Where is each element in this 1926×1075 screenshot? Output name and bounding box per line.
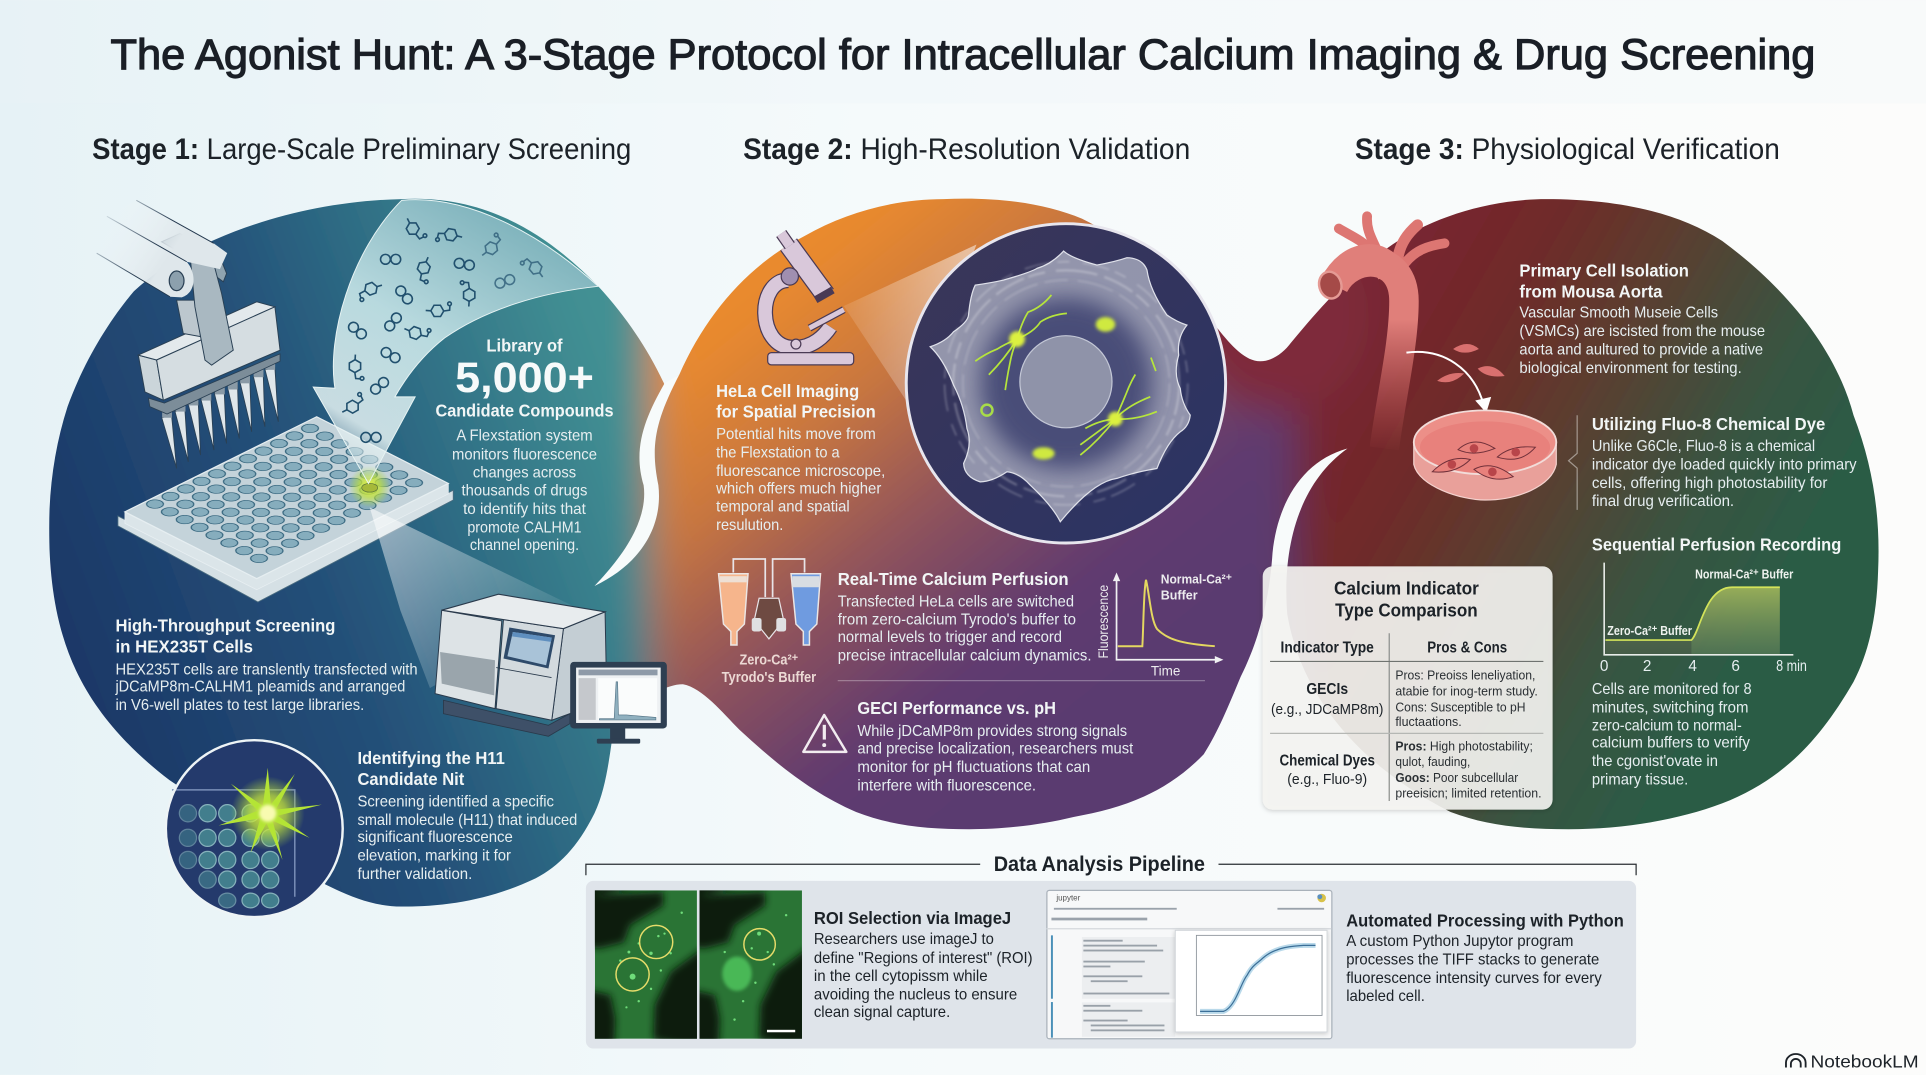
micrographs: ROI selection	[577, 878, 811, 1052]
inset: glowing hit well	[166, 740, 343, 917]
text: perfusion description: calcium buffers to verify	[1592, 735, 1750, 752]
heading: stage 2: Stage 2: High-Resolution Validation	[743, 133, 1190, 166]
heading: data analysis pipeline: Data Analysis Pipeline	[994, 853, 1205, 876]
text: real-time perfusion: normal levels to trigger and record	[838, 629, 1062, 646]
text: high-throughput screening: jDCaMP8m-CALHM1 pleamids and arranged	[115, 679, 405, 696]
label: zero-Ca buffer	[722, 653, 816, 686]
row: GECIs: atabie for inog-term study.	[1395, 683, 1538, 698]
jupyter notebook screenshot	[1047, 890, 1332, 1039]
96-well plate	[118, 417, 453, 602]
text: library callout	[435, 335, 614, 554]
text: HeLa imaging: Potential hits move from	[716, 426, 876, 443]
text: library callout: channel opening.	[470, 537, 579, 554]
text: real-time perfusion: Real-Time Calcium Perfusion	[838, 569, 1069, 589]
row: GECIs: Pros: Preoiss leneliyation,	[1395, 667, 1535, 682]
microscope light beam	[844, 245, 977, 410]
text: HeLa imaging: HeLa Cell Imaging	[716, 381, 859, 401]
row: GECIs: Cons: Susceptible to pH	[1395, 699, 1526, 714]
table header: Pros & Cons	[1427, 639, 1507, 656]
text: ROI selection	[814, 908, 1033, 1021]
text: real-time perfusion: Transfected HeLa cells are switched	[838, 593, 1074, 610]
text: python processing: Automated Processing with Python	[1346, 910, 1624, 930]
panel: stage 3	[1263, 216, 1857, 810]
text: H11 candidate hit: elevation, marking it for	[357, 848, 511, 865]
comparison table card	[1263, 566, 1553, 810]
text: H11 candidate hit: small molecule (H11) that induced	[357, 812, 577, 829]
compound funnel arrow	[313, 200, 598, 483]
text: python processing	[1346, 910, 1624, 1005]
icon: warning triangle	[803, 715, 846, 752]
chart inset: fluorescence curve	[1175, 930, 1327, 1032]
chart: calcium transient: Time	[1151, 663, 1181, 679]
text: HeLa imaging: for Spatial Precision	[716, 402, 876, 422]
text: library callout: Library of	[486, 335, 563, 355]
text: library callout: A Flexstation system	[456, 427, 593, 444]
heading: stage 1: Stage 1: Large-Scale Preliminary Screening	[92, 133, 631, 166]
text: ROI selection: clean signal capture.	[814, 1004, 950, 1021]
chart: sequential perfusion: 6	[1731, 658, 1740, 675]
text: ROI selection: define "Regions of interest" (ROI)	[814, 950, 1033, 967]
text: perfusion description: primary tissue.	[1592, 771, 1688, 788]
text: H11 candidate hit	[357, 748, 577, 883]
table header	[1281, 639, 1507, 656]
chart: sequential perfusion: Zero-Ca²⁺ Buffer	[1607, 623, 1692, 638]
text: GECI performance	[857, 698, 1134, 795]
tip collars	[162, 362, 275, 418]
text: Fluo-8 dye: indicator dye loaded quickly into primary	[1592, 456, 1857, 473]
chart: sequential perfusion	[1600, 563, 1807, 675]
text: high-throughput screening: High-Throughput Screening	[115, 615, 335, 635]
monitor with spike trace	[570, 662, 667, 744]
text: HeLa imaging: fluorescance microscope,	[716, 463, 885, 480]
card title	[1334, 578, 1479, 621]
text: library callout: thousands of drugs	[462, 483, 588, 500]
text: HeLa imaging: temporal and spatial	[716, 499, 850, 516]
row: chemical dyes: preeisicn; limited retention.	[1395, 785, 1542, 800]
row: chemical dyes: Chemical Dyes	[1279, 752, 1375, 769]
icon: petri dish	[1414, 410, 1556, 500]
text: Fluo-8 dye	[1592, 414, 1857, 510]
robotic arm pipette	[97, 200, 280, 468]
text: Fluo-8 dye: Unlike G6Cle, Fluo-8 is a chemical	[1592, 438, 1815, 455]
text: primary cell isolation: Primary Cell Isolation	[1519, 260, 1689, 280]
text: primary cell isolation: Vascular Smooth Museie Cells	[1519, 305, 1718, 322]
text: GECI performance: monitor for pH fluctuations that can	[857, 759, 1090, 776]
text: perfusion description: Cells are monitored for 8	[1592, 681, 1752, 698]
chart: sequential perfusion: 8 min	[1776, 658, 1807, 675]
text: primary cell isolation: (VSMCs) are iscisted from the mouse	[1519, 323, 1765, 340]
text: primary cell isolation: biological environment for testing.	[1519, 360, 1742, 377]
row: chemical dyes: (e.g., Fluo-9)	[1287, 772, 1367, 788]
title: The Agonist Hunt: A 3-Stage Protocol for Intracellular Calcium Imaging & Drug Screening	[111, 31, 1815, 79]
text: real-time perfusion: from zero-calcium Tyrodo's buffer to	[838, 612, 1076, 629]
text: primary cell isolation: from Mousa Aorta	[1519, 281, 1664, 301]
text: HeLa imaging: resulution.	[716, 517, 783, 534]
row: GECIs: fluctaations.	[1395, 714, 1462, 729]
heading: data analysis pipeline	[586, 853, 1636, 876]
chart: sequential perfusion: 2	[1643, 658, 1651, 675]
icon: perfusion syringes	[719, 559, 821, 645]
text: primary cell isolation: aorta and aultured to provide a native	[1519, 341, 1763, 358]
text: GECI performance: interfere with fluorescence.	[857, 778, 1036, 795]
card title: Calcium Indicator	[1334, 578, 1479, 599]
text: library callout: 5,000+	[455, 354, 594, 402]
text: python processing: A custom Python Jupytor program	[1346, 933, 1573, 950]
text: ROI selection: Researchers use imageJ to	[814, 931, 994, 948]
text: Fluo-8 dye: cells, offering high photostability for	[1592, 475, 1827, 492]
molecules	[342, 218, 547, 442]
heading: stage 3: Stage 3: Physiological Verification	[1355, 133, 1780, 166]
text: high-throughput screening	[115, 615, 418, 714]
text: H11 candidate hit: Candidate Nit	[357, 769, 464, 789]
text: HeLa imaging	[715, 381, 885, 534]
text: high-throughput screening: in HEX235T Cells	[115, 636, 253, 656]
text: primary cell isolation	[1519, 260, 1765, 377]
icon: microscope	[765, 233, 854, 365]
text: library callout: promote CALHM1	[467, 520, 582, 537]
chart: sequential perfusion: 4	[1688, 658, 1697, 675]
panel: stage 2	[715, 224, 1232, 795]
bracket connector	[1569, 415, 1577, 510]
row: GECIs	[1271, 667, 1538, 729]
heading: sequential perfusion: Sequential Perfusion Recording	[1592, 534, 1841, 554]
text: GECI performance: and precise localization, researchers must	[857, 741, 1134, 758]
row: chemical dyes: Pros: High photostability;	[1395, 739, 1533, 754]
row: GECIs: GECIs	[1306, 681, 1348, 698]
row: chemical dyes: qulot, fauding,	[1395, 754, 1470, 769]
row: chemical dyes	[1279, 739, 1542, 800]
label: zero-Ca buffer: Tyrodo's Buffer	[722, 670, 816, 686]
panel: data analysis pipeline	[577, 878, 1636, 1052]
light cone to reader	[370, 507, 577, 688]
NotebookLM logo: NotebookLM	[1811, 1052, 1919, 1072]
chart: calcium transient: Normal-Ca²⁺	[1161, 572, 1232, 587]
label: zero-Ca buffer: Zero-Ca²⁺	[739, 653, 799, 669]
isolation arrow and cells	[1406, 344, 1505, 413]
cell micrograph	[906, 224, 1226, 543]
chart: calcium transient: Buffer	[1161, 588, 1198, 603]
flowing blob background spanning all stages	[49, 198, 1879, 907]
chart: calcium transient	[1095, 572, 1232, 679]
text: library callout: changes across	[473, 464, 576, 481]
text: perfusion description	[1592, 681, 1752, 788]
text: ROI selection: avoiding the nucleus to ensure	[814, 986, 1017, 1003]
chart: calcium transient: Fluorescence	[1095, 585, 1111, 658]
text: H11 candidate hit: further validation.	[357, 866, 472, 883]
card title: Type Comparison	[1335, 600, 1478, 621]
text: library callout: monitors fluorescence	[452, 447, 597, 464]
text: real-time perfusion	[838, 569, 1091, 664]
text: python processing: labeled cell.	[1346, 988, 1425, 1005]
text: perfusion description: the cgonist'ovate in	[1592, 753, 1718, 770]
row: chemical dyes: Goos: Poor subcellular	[1395, 770, 1519, 785]
text: Fluo-8 dye: Utilizing Fluo-8 Chemical Dye	[1592, 414, 1825, 434]
row: GECIs: (e.g., JDCaMP8m)	[1271, 702, 1383, 718]
text: HeLa imaging: which offers much higher	[715, 480, 881, 497]
text: high-throughput screening: in V6-well plates to test large libraries.	[115, 697, 364, 714]
text: ROI selection: ROI Selection via ImageJ	[814, 908, 1011, 928]
table header: Indicator Type	[1281, 639, 1374, 656]
jupyter notebook screenshot: jupyter	[1055, 893, 1081, 902]
text: ROI selection: in the cell cytopissm while	[814, 968, 988, 985]
text: perfusion description: minutes, switching from	[1592, 700, 1749, 717]
text: library callout: Candidate Compounds	[435, 401, 614, 421]
chart: sequential perfusion: Normal-Ca²⁺ Buffer	[1695, 567, 1793, 582]
text: GECI performance: GECI Performance vs. pH	[857, 698, 1056, 718]
chart: sequential perfusion: 0	[1600, 658, 1608, 675]
icon: aorta	[1316, 216, 1444, 448]
text: H11 candidate hit: Screening identified a specific	[357, 794, 554, 811]
text: python processing: processes the TIFF stacks to generate	[1346, 951, 1599, 968]
pipette tips	[162, 367, 278, 468]
text: GECI performance: While jDCaMP8m provides strong signals	[857, 723, 1127, 740]
white swoosh between stage 1 and stage 2	[595, 375, 679, 586]
text: H11 candidate hit: Identifying the H11	[357, 748, 505, 768]
text: perfusion description: zero-calcium to normal-	[1592, 717, 1742, 734]
panel: stage 1	[97, 200, 667, 917]
text: real-time perfusion: precise intracellular calcium dynamics.	[838, 647, 1091, 664]
text: library callout: to identify hits that	[463, 501, 587, 518]
text: python processing: fluorescence intensity curves for every	[1346, 970, 1602, 987]
flexstation instrument	[435, 594, 607, 736]
text: HeLa imaging: the Flexstation to a	[716, 445, 840, 462]
text: Fluo-8 dye: final drug verification.	[1592, 493, 1734, 510]
text: H11 candidate hit: significant fluorescence	[357, 829, 513, 846]
text: high-throughput screening: HEX235T cells are translently transfected with	[115, 661, 418, 678]
